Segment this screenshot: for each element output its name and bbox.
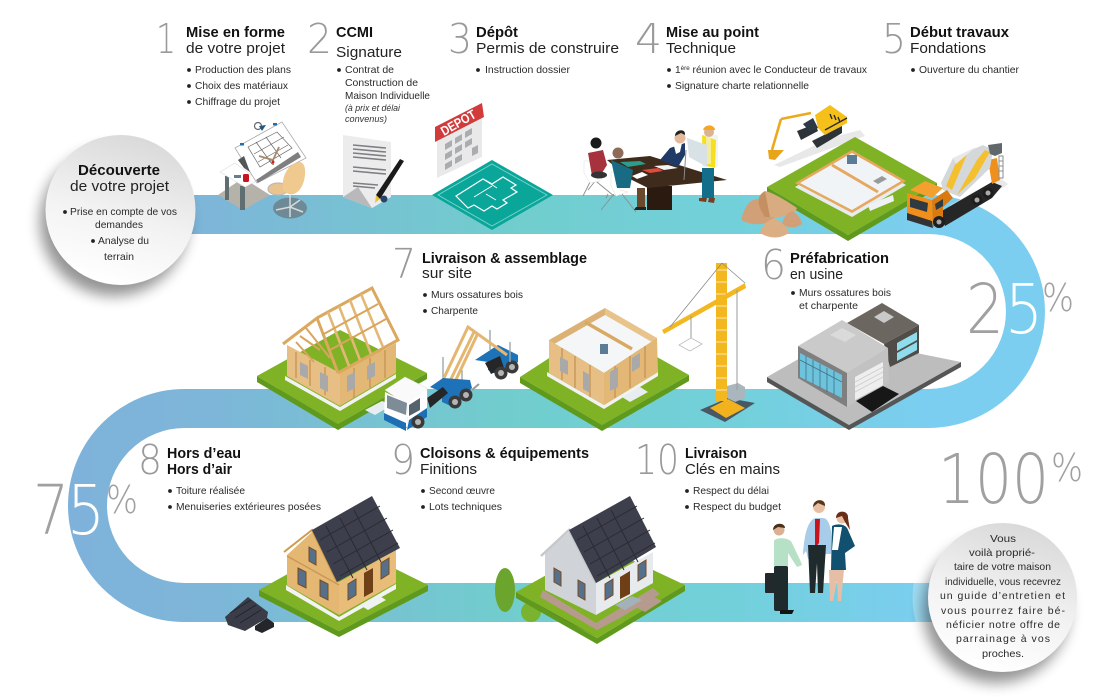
step 9 heading and list xyxy=(391,436,589,513)
step 10 heading and list: Respect du budget xyxy=(693,501,781,513)
step 4 heading and list: réunion avec le Conducteur de travaux xyxy=(690,64,868,76)
step 8 heading and list: 8 xyxy=(138,436,162,484)
step 4 heading and list: 4 xyxy=(635,15,662,63)
step 8 heading and list: Toiture réalisée xyxy=(176,485,245,497)
circle: découverte xyxy=(40,135,196,296)
step 3 heading and list: Dépôt xyxy=(476,24,518,41)
step 9 heading and list: Lots techniques xyxy=(429,501,502,513)
icon: depot calendar: DEPOT xyxy=(438,107,478,139)
icon: drawing table and chair xyxy=(218,122,307,218)
circle: vous voilà propriétaire: néficier notre offre de xyxy=(946,619,1060,631)
step 4 heading and list: 1 xyxy=(675,64,681,76)
progress: 25%: 5 xyxy=(1005,270,1043,350)
step 7 heading and list: Livraison & assemblage xyxy=(422,250,587,267)
icon: green plot with foundation xyxy=(767,137,937,241)
circle: vous voilà propriétaire: parrainage à vos xyxy=(956,633,1050,645)
icon: depot calendar xyxy=(435,103,484,178)
icon: gravel piles xyxy=(741,191,802,238)
step 2 heading and list: CCMI xyxy=(336,24,373,41)
icon: conifer and round bush xyxy=(495,568,541,622)
circle: vous voilà propriétaire: un guide d’entretien et xyxy=(940,590,1065,602)
progress: 75% xyxy=(33,471,138,551)
step 5 heading and list: 5 xyxy=(882,15,906,63)
step 8 heading and list: Hors d’eau xyxy=(167,445,241,462)
step 10 heading and list: 10 xyxy=(635,436,679,484)
step 9 heading and list: Second œuvre xyxy=(429,485,495,497)
step 1 heading and list: Production des plans xyxy=(195,64,291,76)
step 6 heading and list: Préfabrication xyxy=(790,250,889,267)
step 4 heading and list: Mise au point xyxy=(666,24,759,41)
circle: vous voilà propriétaire: voilà proprié- xyxy=(969,547,1036,559)
icon: timber truck xyxy=(384,327,518,431)
step 4 heading and list xyxy=(635,15,868,92)
step 1 heading and list xyxy=(156,15,291,108)
step 5 heading and list: Début travaux xyxy=(910,24,1010,41)
step 2 heading and list: Maison Individuelle xyxy=(345,90,430,102)
step 3 heading and list: 3 xyxy=(448,15,472,63)
step 2 heading and list: Construction de xyxy=(345,77,418,89)
step 7 heading and list: sur site xyxy=(422,265,472,282)
icon: stack of roof shingles xyxy=(225,597,274,633)
step 1 heading and list: Mise en forme xyxy=(186,24,285,41)
step 7 heading and list: Charpente xyxy=(431,305,478,317)
step 1 heading and list: Choix des matériaux xyxy=(195,80,289,92)
icon: tower crane xyxy=(662,263,755,422)
progress: 25%: % xyxy=(1042,276,1074,320)
step 10 heading and list: Livraison xyxy=(685,445,747,462)
step 1 heading and list: de votre projet xyxy=(186,40,286,57)
step 6 heading and list xyxy=(761,241,891,312)
progress: 25% xyxy=(966,270,1074,350)
step 10 heading and list: Respect du délai xyxy=(693,485,769,497)
step 5 heading and list: Fondations xyxy=(910,40,986,57)
progress: 75%: % xyxy=(106,478,138,522)
icon: timber frame walls on plot xyxy=(520,308,689,431)
circle: vous voilà propriétaire: Vous xyxy=(990,533,1016,545)
step 6 heading and list: 6 xyxy=(761,241,786,289)
step 9 heading and list: Cloisons & équipements xyxy=(420,445,589,462)
step 2 heading and list: 2 xyxy=(307,15,332,63)
step 6 heading and list: et charpente xyxy=(799,300,858,312)
step 6 heading and list: en usine xyxy=(790,266,843,283)
circle: vous voilà propriétaire: taire de votre maison xyxy=(954,561,1051,573)
circle: découverte: terrain xyxy=(104,251,134,263)
icon: meeting around a table xyxy=(583,125,727,212)
step 8 heading and list: Menuiseries extérieures posées xyxy=(176,501,321,513)
icon: timber frame house with roof structure xyxy=(257,288,427,430)
icon: prefabrication factory xyxy=(767,303,961,430)
circle: vous voilà propriétaire: individuelle, vous recevrez xyxy=(945,576,1061,588)
icon: excavator xyxy=(768,105,865,167)
step 7 heading and list: Murs ossatures bois xyxy=(431,289,523,301)
step 3 heading and list: Instruction dossier xyxy=(485,64,570,76)
step 3 heading and list: Permis de construire xyxy=(476,40,619,57)
circle: découverte: Prise en compte de vos xyxy=(70,206,177,218)
step 2 heading and list: Signature xyxy=(336,44,402,61)
icon: handshake between client and builders xyxy=(765,500,855,614)
circle: vous voilà propriétaire: proches. xyxy=(982,648,1024,660)
circle: découverte: Découverte xyxy=(78,162,160,179)
circle: découverte: Analyse du xyxy=(98,235,149,247)
step 9 heading and list: Finitions xyxy=(420,461,477,478)
step 10 heading and list xyxy=(635,436,781,513)
winding progress road xyxy=(88,214,1025,602)
step 2 heading and list: convenus) xyxy=(345,114,387,124)
circle: vous voilà propriétaire: vous pourrez faire bé- xyxy=(941,605,1066,617)
progress: 75%: 7 xyxy=(33,471,69,551)
step 3 heading and list xyxy=(448,15,619,76)
icon: finished wooden house xyxy=(259,496,428,637)
step 2 heading and list: (à prix et délai xyxy=(345,103,401,113)
step 4 heading and list: Technique xyxy=(666,40,736,57)
progress: 100%: 100 xyxy=(938,440,1049,520)
step 8 heading and list xyxy=(138,436,321,513)
step 7 heading and list xyxy=(392,240,587,317)
step 10 heading and list: Clés en mains xyxy=(685,461,780,478)
step 6 heading and list: Murs ossatures bois xyxy=(799,287,891,299)
step 7 heading and list: 7 xyxy=(392,240,416,288)
step 2 heading and list xyxy=(307,15,430,124)
step 4 heading and list: Signature charte relationnelle xyxy=(675,80,809,92)
circle: vous voilà propriétaire xyxy=(912,508,1092,688)
progress: 75%: 5 xyxy=(67,471,105,551)
step 5 heading and list xyxy=(882,15,1019,76)
icon: blueprint floor plan xyxy=(432,160,553,230)
step 1 heading and list: 1 xyxy=(156,15,176,63)
icon: concrete mixer truck xyxy=(907,143,1008,228)
step 2 heading and list: Contrat de xyxy=(345,64,394,76)
circle: découverte: demandes xyxy=(95,219,143,231)
step 5 heading and list: Ouverture du chantier xyxy=(919,64,1019,76)
step 1 heading and list: Chiffrage du projet xyxy=(195,96,280,108)
icon: signed contract xyxy=(343,135,404,208)
progress: 25%: 2 xyxy=(966,270,1004,350)
icon: finished white house xyxy=(516,496,685,644)
step 8 heading and list: Hors d’air xyxy=(167,461,232,478)
step 4 heading and list: ère xyxy=(681,65,690,72)
circle: découverte: de votre projet xyxy=(70,178,170,195)
progress: 100%: % xyxy=(1051,446,1083,490)
step 9 heading and list: 9 xyxy=(391,436,415,484)
